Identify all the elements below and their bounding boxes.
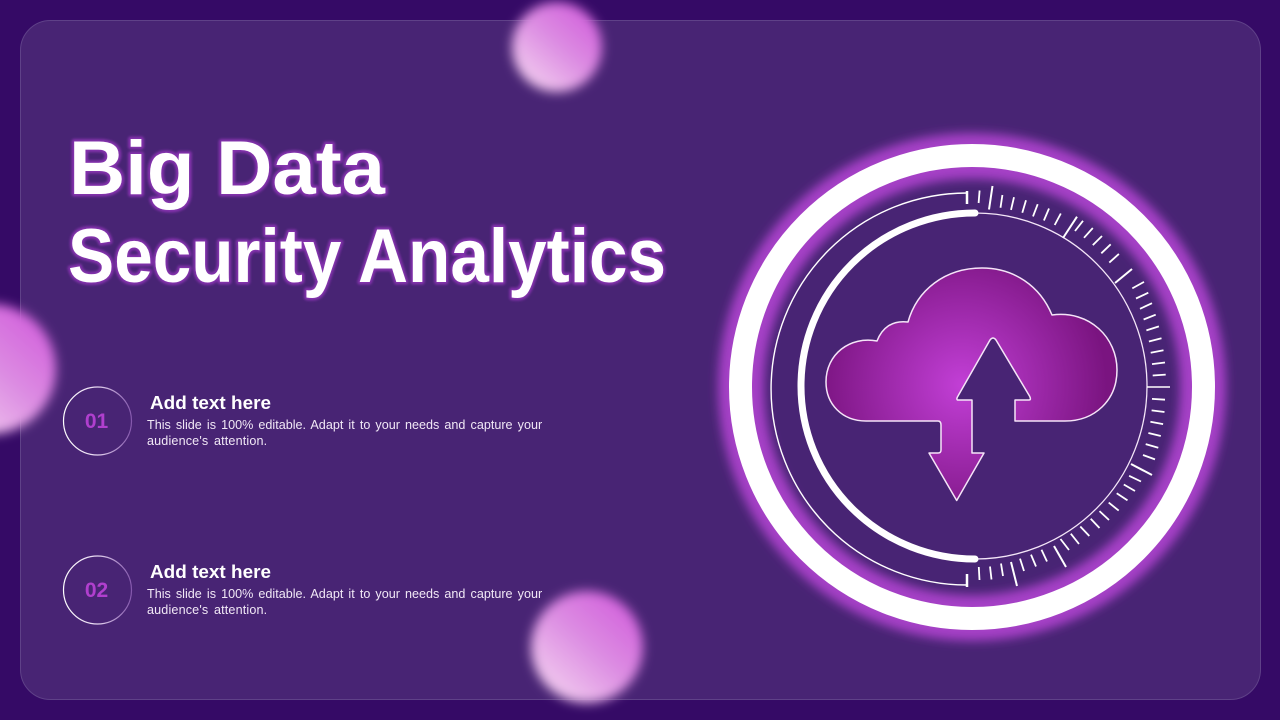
thick inner arc xyxy=(801,213,975,559)
outer white ring xyxy=(740,156,1204,618)
body text 02: This slide is 100% editable. Adapt it to your needs and capture your xyxy=(147,587,542,601)
item 01 xyxy=(64,387,542,455)
body text 02 xyxy=(147,587,542,617)
icon: cloud with upload and download arrows xyxy=(826,268,1117,500)
body text 01 xyxy=(147,418,542,448)
heading 01: Add text here xyxy=(150,392,271,413)
thin outer arc xyxy=(771,193,967,585)
ring glow xyxy=(741,156,1203,618)
title xyxy=(68,126,666,299)
blurred orb: left xyxy=(0,304,56,434)
title: Security Analytics xyxy=(68,214,666,299)
icon: security gauge ring with cloud xyxy=(740,156,1204,618)
body text 01: This slide is 100% editable. Adapt it to your needs and capture your xyxy=(147,418,542,432)
number badge 01 xyxy=(64,387,132,455)
body text 01: audience's attention. xyxy=(147,434,267,448)
title: Big Data xyxy=(69,126,386,211)
title: Big Data xyxy=(69,126,386,211)
item 02 xyxy=(64,556,542,624)
body text 02: audience's attention. xyxy=(147,603,267,617)
number badge 02 xyxy=(64,556,132,624)
blurred orb: top xyxy=(512,2,602,92)
title: Security Analytics xyxy=(68,214,666,299)
heading 02: Add text here xyxy=(150,561,271,582)
gauge ticks xyxy=(967,186,1170,587)
thin inner arc xyxy=(975,213,1147,559)
number badge 02: 02 xyxy=(85,579,108,602)
blurred orb: bottom xyxy=(531,591,643,703)
number badge 01: 01 xyxy=(85,410,108,433)
